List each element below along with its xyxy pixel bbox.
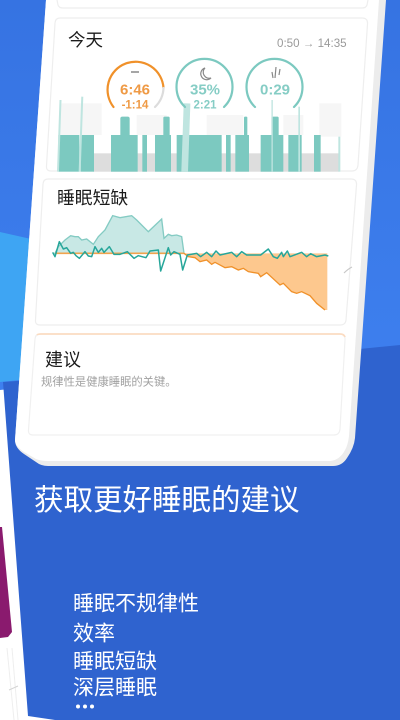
headline: 获取更好睡眠的建议 (34, 484, 300, 517)
advice text: 规律性是健康睡眠的关键。 (41, 374, 177, 388)
ring: awake time (246, 59, 303, 107)
card: top partial (57, 0, 368, 8)
card: advice (28, 334, 345, 435)
phone mockup (15, 0, 386, 466)
card: today (46, 18, 368, 172)
feature list: 深层睡眠 (73, 676, 157, 700)
feature list (73, 592, 199, 708)
sleep stage bar chart (57, 97, 341, 172)
heading: today: 今天 (68, 30, 103, 50)
ring: deep sleep (176, 59, 233, 112)
ring: deep sleep: 35% (190, 82, 220, 98)
heading: advice: 建议 (45, 350, 81, 370)
ring: sleep duration: 6:46 (120, 82, 150, 98)
feature list: 睡眠短缺 (73, 650, 157, 674)
line chart: sleep deficit (53, 216, 328, 310)
ring: deep sleep: 2:21 (193, 100, 217, 112)
ring: sleep duration: -1:14 (122, 100, 149, 112)
side mark (344, 267, 352, 273)
feature list: 睡眠不规律性 (73, 592, 199, 616)
sleep time range: 0:50 → 14:35 (277, 37, 347, 50)
heading: sleep deficit: 睡眠短缺 (57, 188, 128, 208)
next screenshot peek: purple card (0, 527, 18, 720)
ring: sleep duration (108, 62, 164, 112)
feature list: 效率 (73, 622, 115, 646)
card: sleep deficit (35, 179, 357, 325)
ring: awake time: 0:29 (260, 82, 290, 98)
